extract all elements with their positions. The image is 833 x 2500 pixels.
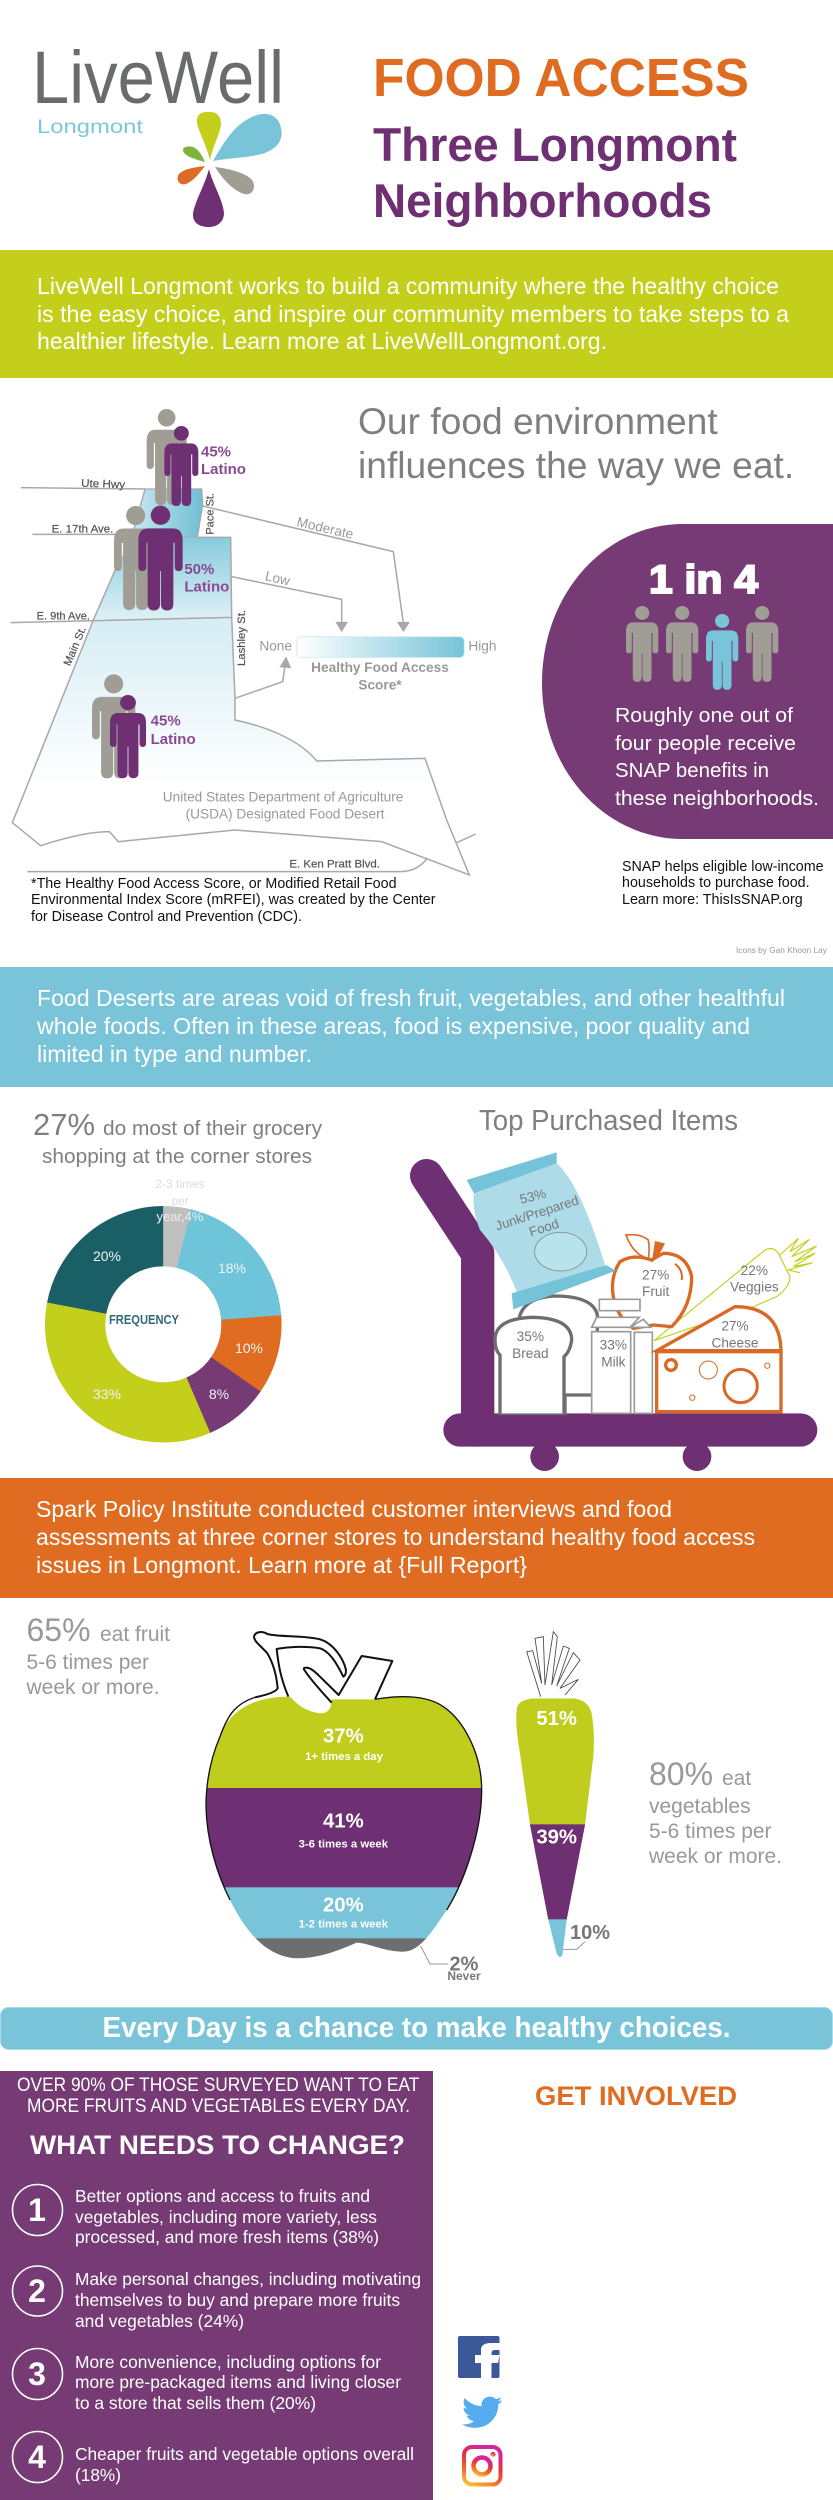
Spark Policy band: issues in Longmont. Learn more at {Full Report} [36, 1552, 527, 1578]
item: junk food bag: Food [527, 1216, 561, 1240]
arrow labels [264, 514, 355, 589]
middle neighborhood [94, 537, 232, 620]
heading: food environment: influences the way we eat. [358, 444, 794, 486]
arrow labels: Moderate [295, 514, 355, 542]
SNAP note: Learn more: ThisIsSNAP.org [622, 892, 803, 908]
cart illustration [427, 1152, 817, 1471]
item 2 [12, 2266, 426, 2331]
donut chart: frequency: 20% [93, 1248, 121, 1264]
people: lower neighborhood [92, 674, 196, 778]
stat: 80% eat vegetables: eat [722, 1767, 751, 1790]
SNAP note: SNAP helps eligible low-income [622, 859, 824, 875]
people: top neighborhood [147, 409, 246, 506]
item 2: Make personal changes, including motivating [75, 2269, 421, 2289]
icon: facebook [458, 2336, 500, 2378]
stat: 65% eat fruit: 5-6 times per [26, 1651, 149, 1674]
heading: corner store shopping: do most of their grocery [103, 1117, 323, 1140]
1 in 4 headline: 1 in 4 [649, 558, 759, 602]
item: carrot [654, 1238, 817, 1341]
apple chart: 3-6 times a week [299, 1839, 389, 1851]
stat: 80% eat vegetables: vegetables [649, 1795, 751, 1818]
map: neighborhoods and food access score [11, 409, 496, 875]
logo: LiveWell Longmont: LiveWell [32, 36, 284, 119]
top neighborhood [132, 489, 203, 537]
carrot chart [513, 1632, 610, 1961]
item: milk [592, 1299, 652, 1413]
food deserts band: Food Deserts are areas void of fresh fruit, vegetables, and other healthful [37, 985, 785, 1011]
item 4: 4 [28, 2439, 46, 2475]
scale bar: Score* [358, 677, 402, 692]
people: middle neighborhood [114, 506, 229, 610]
people: middle neighborhood: 50% [184, 561, 214, 578]
donut chart: frequency: 18% [218, 1260, 246, 1276]
footnote: Environmental Index Score (mRFEI), was created by the Center [31, 892, 436, 908]
panel heading: WHAT NEEDS TO CHANGE? [30, 2130, 405, 2160]
map boundary [11, 488, 476, 875]
title: FOOD ACCESS [373, 48, 749, 108]
arrow labels: Low [264, 568, 292, 589]
logo: LiveWell Longmont [32, 36, 284, 227]
SNAP note: households to purchase food. [622, 875, 810, 891]
donut chart: frequency: 2-3 times [155, 1177, 205, 1191]
logo: LiveWell Longmont: Longmont [37, 117, 144, 138]
item: junk food bag: Junk/Prepared [493, 1193, 580, 1234]
item 2: 2 [28, 2273, 46, 2309]
Spark Policy band [0, 1478, 833, 1598]
item: bread: 35% [517, 1329, 544, 1344]
stat: 65% eat fruit: 65% [26, 1612, 91, 1648]
SNAP statement: SNAP benefits in [615, 759, 769, 782]
item 3: to a store that sells them (20%) [75, 2393, 316, 2413]
intro band: LiveWell Longmont works to build a community where the healthy choice [37, 273, 779, 299]
item: cheese: Cheese [711, 1335, 759, 1350]
apple chart: 37% [323, 1726, 364, 1748]
heading: corner store shopping: shopping at the corner stores [42, 1145, 312, 1168]
Spark Policy band: Spark Policy Institute conducted customer interviews and food [36, 1496, 672, 1522]
item 4: (18%) [75, 2465, 121, 2485]
carrot chart: 10% [570, 1922, 610, 1944]
arrow: none [235, 658, 290, 698]
donut chart: frequency: 33% [93, 1386, 121, 1402]
street labels: E. Ken Pratt Blvd. [289, 858, 380, 870]
icon credit: Icons by Gan Khoon Lay [736, 945, 828, 955]
scale bar [259, 637, 496, 692]
scale bar: High [468, 639, 496, 654]
item 3: 3 [28, 2356, 46, 2392]
item 1: processed, and more fresh items (38%) [75, 2227, 379, 2247]
donut chart: frequency [41, 1177, 286, 1447]
apple chart [200, 1632, 487, 1983]
icon: twitter [462, 2397, 502, 2428]
icon: four people, one highlighted [626, 606, 778, 690]
title [373, 48, 749, 227]
scale bar: Healthy Food Access [311, 660, 449, 675]
arrow: low [232, 577, 347, 631]
item: apple: 27% [642, 1267, 669, 1282]
cart [427, 1176, 817, 1471]
item 1 [12, 2184, 382, 2247]
item 3 [12, 2348, 406, 2413]
item: milk: Milk [601, 1355, 626, 1370]
item 2: and vegetables (24%) [75, 2311, 244, 2331]
item: cheese [657, 1307, 781, 1412]
stat: 80% eat vegetables: 5-6 times per [649, 1820, 772, 1843]
street labels: Pace St. [204, 493, 216, 535]
food deserts band: limited in type and number. [37, 1041, 312, 1067]
item: cheese: 27% [721, 1319, 749, 1334]
banner: every day: Every Day is a chance to make healthy choices. [102, 2012, 730, 2044]
donut chart: frequency: FREQUENCY [109, 1312, 179, 1327]
apple chart: 41% [323, 1811, 364, 1833]
SNAP statement: these neighborhoods. [615, 787, 819, 810]
item: junk food bag [467, 1152, 616, 1309]
street labels [37, 478, 380, 870]
stat: 80% eat vegetables: week or more. [648, 1845, 782, 1868]
food deserts band [0, 967, 833, 1087]
heading: get involved: GET INVOLVED [535, 2081, 737, 2111]
intro band [0, 250, 833, 378]
donut chart: frequency: year,4% [157, 1209, 204, 1224]
item 3: more pre-packaged items and living closer [75, 2372, 401, 2392]
item: apple: Fruit [642, 1284, 670, 1299]
item: bread: Bread [512, 1346, 549, 1361]
heading: corner store shopping: 27% [33, 1107, 95, 1142]
apple chart: 1+ times a day [305, 1751, 384, 1763]
SNAP statement: four people receive [615, 732, 796, 755]
panel: what needs to change [0, 2071, 433, 2500]
item: carrot: 22% [741, 1263, 768, 1278]
street labels: Ute Hwy [81, 478, 126, 491]
charts: apple and carrot [200, 1632, 610, 1983]
donut chart: frequency: per [171, 1194, 189, 1208]
item 3: More convenience, including options for [75, 2352, 381, 2372]
intro band: is the easy choice, and inspire our community members to take steps to a [37, 301, 789, 327]
intro band: healthier lifestyle. Learn more at LiveWellLongmont.org. [37, 328, 607, 354]
icon: instagram [464, 2447, 500, 2484]
item: junk food bag: 53% [518, 1186, 548, 1207]
item: apple [612, 1235, 692, 1328]
street labels: Lashley St. [236, 610, 248, 666]
people: lower neighborhood: 45% [151, 712, 181, 729]
street labels: E. 9th Ave. [37, 610, 90, 622]
item 1: Better options and access to fruits and [75, 2186, 370, 2206]
lower neighborhood [12, 618, 469, 875]
banner: every day [0, 2008, 832, 2050]
item 2: themselves to buy and prepare more fruits [75, 2290, 400, 2310]
footnote: for Disease Control and Prevention (CDC). [31, 909, 302, 925]
item: milk: 33% [600, 1337, 627, 1352]
heading: food environment: Our food environment [358, 400, 718, 442]
item 1: vegetables, including more variety, less [75, 2207, 377, 2227]
people: middle neighborhood: Latino [184, 579, 229, 596]
people: top neighborhood: Latino [201, 461, 246, 478]
survey statement: MORE FRUITS AND VEGETABLES EVERY DAY. [27, 2095, 410, 2117]
item 4 [12, 2432, 419, 2485]
food deserts band: whole foods. Often in these areas, food is expensive, poor quality and [36, 1013, 750, 1039]
donut chart: frequency: 10% [235, 1340, 263, 1356]
title: Neighborhoods [373, 174, 712, 227]
scale bar: None [259, 639, 292, 654]
street labels: Main St. [62, 625, 89, 668]
arrow: moderate [203, 506, 409, 631]
apple chart: 1-2 times a week [299, 1918, 389, 1930]
survey statement: OVER 90% OF THOSE SURVEYED WANT TO EAT [17, 2074, 419, 2096]
Spark Policy band: assessments at three corner stores to understand healthy food access [36, 1524, 755, 1550]
apple chart: 20% [323, 1895, 364, 1917]
SNAP statement: Roughly one out of [615, 704, 793, 727]
apple chart: 2% [450, 1954, 479, 1976]
item: bread [495, 1296, 597, 1413]
street labels: E. 17th Ave. [52, 524, 113, 536]
donut chart: frequency: 8% [209, 1386, 229, 1402]
stat: 80% eat vegetables: 80% [649, 1756, 713, 1792]
item 4: Cheaper fruits and vegetable options overall [75, 2444, 414, 2464]
people: top neighborhood: 45% [201, 444, 231, 461]
people: lower neighborhood: Latino [151, 731, 196, 748]
USDA label: (USDA) Designated Food Desert [186, 807, 385, 822]
heading: top purchased items: Top Purchased Items [479, 1105, 738, 1137]
title: Three Longmont [373, 118, 737, 171]
USDA label: United States Department of Agriculture [163, 790, 403, 805]
stat: 65% eat fruit: eat fruit [100, 1623, 170, 1646]
stat: 65% eat fruit: week or more. [26, 1676, 160, 1699]
footnote: *The Healthy Food Access Score, or Modified Retail Food [31, 876, 397, 892]
carrot chart: 39% [536, 1826, 577, 1848]
item: carrot: Veggies [730, 1280, 779, 1295]
item 1: 1 [28, 2192, 46, 2228]
carrot chart: 51% [536, 1708, 577, 1730]
apple chart: Never [447, 1969, 481, 1983]
panel: 1 in 4 SNAP [542, 524, 833, 839]
